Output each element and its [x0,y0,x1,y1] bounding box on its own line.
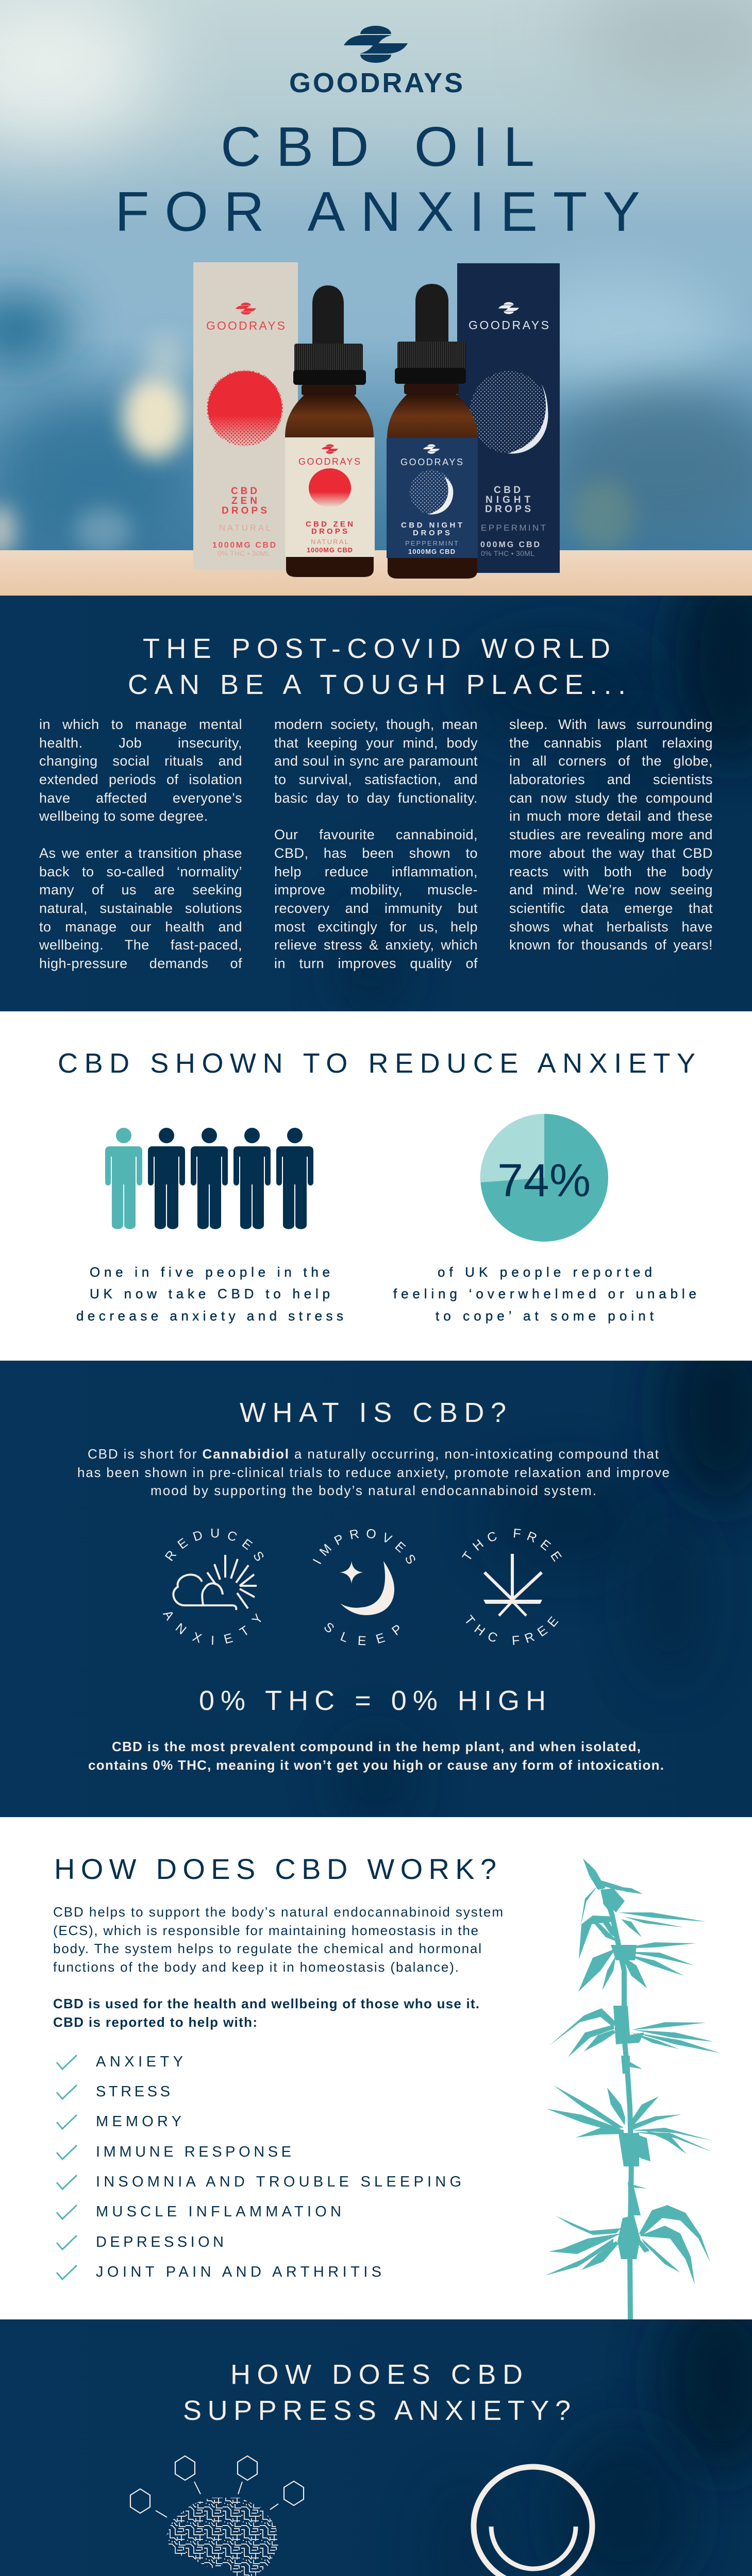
text column 3: scientific data emerge that [509,901,713,916]
text column 2: that keeping your mind, body [274,735,478,751]
text column 1 [39,716,242,976]
text column 3: shows what herbalists have [509,919,713,935]
intro paragraph: CBD is short for Cannabidiol a naturally occurring, non-intoxicating compound that [88,1446,659,1462]
intro paragraph: mood by supporting the body’s natural endocannabinoid system. [151,1483,596,1498]
product box: zen drops: GOODRAYS [206,319,285,332]
icon: improves sleep [312,1529,415,1646]
description paragraph: (ECS), which is responsible for maintaining homeostasis in the [53,1923,478,1938]
text column 2: most excitingly for us, help [274,919,478,935]
text column 2: Our favourite cannabinoid, [274,827,478,842]
text column 1: natural, sustainable solutions [39,901,242,916]
text column 3: in much more detail and these [509,808,713,824]
product bottle: zen drops: GOODRAYS [298,456,360,467]
bold paragraph [88,1739,664,1773]
logo [289,26,463,98]
text column 3: sleep. With laws surrounding [509,717,713,732]
heading [183,2359,571,2426]
text column 3: reacts with both the body [509,863,713,879]
icon: reduces anxiety [163,1529,264,1645]
hero blurred background [0,0,752,596]
text column 2: and soul in sync are paramount [274,753,478,769]
caption: one in five: decrease anxiety and stress [76,1308,343,1324]
table surface [0,550,752,596]
text column 1: changing social rituals and [39,753,242,769]
text column 3: can now study the compound [509,790,713,806]
heading: HOW DOES CBD WORK? [54,1853,496,1885]
pie chart: 74% [480,1114,608,1242]
pie chart: 74%: 74% [497,1155,591,1207]
product box: zen drops: CBD [231,486,257,497]
checklist: ANXIETY [96,2054,183,2070]
checklist [57,2054,461,2280]
product bottle: night drops [387,284,478,579]
logo: GOODRAYS [289,67,463,98]
text column 2: in turn improves quality of [274,956,478,971]
icon: improves sleep: SLEEP [325,1623,399,1646]
product box: night drops: CBD [494,485,521,496]
bold paragraph: CBD is the most prevalent compound in the hemp plant, and when isolated, [112,1739,641,1754]
intro paragraph [77,1446,670,1498]
text column 1: many of us are seeking [39,882,242,897]
caption: 74 percent: feeling ‘overwhelmed or unable [393,1286,696,1301]
heading: THE POST-COVID WORLD [143,633,610,664]
section background [0,596,752,1011]
title: CBD OIL [221,115,534,178]
description paragraph: functions of the body and keep it in homeostasis (balance). [53,1959,459,1975]
bold statement [53,1996,479,2030]
statement: 0% THC = 0% high: 0% THC = 0% HIGH [199,1685,546,1716]
product bottle: night drops: PEPPERMINT [405,539,458,547]
panel: CBD shown to reduce anxiety [0,1011,752,1361]
product box: night drops: 000MG CBD [480,540,540,549]
product bottle: night drops: GOODRAYS [400,457,463,467]
product box: zen drops: ZEN [231,496,257,506]
product bottle: zen drops: 1000MG CBD [307,546,353,554]
text column 3 [509,716,713,976]
product box: zen drops: 0% THC • 30ML [218,549,270,557]
caption: one in five: UK now take CBD to help [90,1286,330,1301]
bold statement: CBD is reported to help with: [53,2014,257,2030]
text column 2: relieve stress & anxiety, which [274,937,478,953]
title [115,115,640,243]
product box: zen drops: DROPS [222,505,267,516]
icon: improves sleep: IMPROVES [312,1529,415,1564]
product bottle: night drops: CBD NIGHT [401,521,462,530]
text column 3: and mind. We’re now seeing [509,882,713,897]
heading [128,633,626,700]
text column 3: known for thousands of years! [509,937,713,953]
checklist: DEPRESSION [96,2234,224,2250]
product box: night drops: NIGHT [486,495,530,505]
text column 1: As we enter a transition phase [39,845,242,861]
caption: 74 percent: to cope’ at some point [436,1308,654,1324]
panel: how does CBD work [0,1817,752,2319]
text column 2: to survival, satisfaction, and [274,772,478,787]
people pictogram: one in five [105,1128,313,1229]
text column 2: recovery and immunity but [274,901,478,916]
text column 3: laboratories and scientists [509,772,713,787]
checklist: JOINT PAIN AND ARTHRITIS [96,2264,381,2280]
product box: night drops: EPPERMINT [481,523,546,533]
product bottle: zen drops: CBD ZEN [306,520,353,529]
icon: circuit brain with molecules [130,2456,304,2576]
title: FOR ANXIETY [115,180,640,243]
text column 3: studies are revealing more and [509,827,713,842]
product box: zen drops: 1000MG CBD [212,541,276,550]
text column 1: in which to manage mental [39,717,242,732]
text column 1: health. Job insecurity, [39,735,242,751]
icon: THC free [462,1529,562,1645]
product bottle: zen drops: NATURAL [311,538,348,546]
text column 2: modern society, though, mean [274,717,478,732]
text column 1: wellbeing to some degree. [39,808,208,824]
checklist: STRESS [96,2083,170,2100]
text column 2: help reduce inflammation, [274,863,478,879]
product bottle: night drops: 1000MG CBD [408,548,455,555]
description paragraph [53,1904,503,1975]
text column 1: high-pressure demands of [39,956,242,971]
illustration: cannabis plant [545,1858,720,2319]
panel: how does CBD suppress anxiety [0,2319,752,2576]
text column 1: have affected everyone’s [39,790,242,806]
text column 3: in all corners of the globe, [509,753,713,769]
product box: night drops: 0% THC • 30ML [481,549,534,557]
product bottle: zen drops [285,285,375,577]
product bottle: night drops: DROPS [413,529,450,537]
section background [0,2319,752,2576]
icon: reduces anxiety: REDUCES [165,1529,264,1561]
icon: THC free: THC FREE [466,1615,559,1645]
icon: smiley [474,2467,592,2576]
product box: night drops [457,263,560,573]
text column 3: more about the way that CBD [509,845,713,861]
caption: 74 percent: of UK people reported [438,1264,652,1280]
description paragraph: body. The system helps to regulate the chemical and hormonal [53,1941,481,1956]
panel: hero [0,0,752,597]
text column 2 [274,716,478,976]
text column 2: basic day to day functionality. [274,790,478,806]
panel: post-covid world [0,596,752,1011]
heading: HOW DOES CBD [230,2359,523,2390]
heading: WHAT IS CBD? [240,1397,506,1428]
text column 2: improve mobility, muscle- [274,882,478,897]
text column 2: CBD, has been shown to [274,845,478,861]
product box: zen drops: NATURAL [219,523,271,533]
text column 1: extended periods of isolation [39,772,242,787]
heading: CBD SHOWN TO REDUCE ANXIETY [58,1048,695,1079]
caption: 74 percent [393,1264,696,1324]
icon: THC free: THC FREE [462,1529,562,1562]
icon: reduces anxiety: ANXIETY [163,1612,261,1645]
heading: CAN BE A TOUGH PLACE... [128,669,626,700]
product box: night drops: GOODRAYS [469,318,549,332]
caption: one in five: One in five people in the [90,1264,330,1280]
text column 1: back to so-called ‘normality’ [39,863,242,879]
checklist: MEMORY [96,2113,181,2130]
description paragraph: CBD helps to support the body’s natural endocannabinoid system [53,1904,503,1920]
text column 3: the cannabis plant relaxing [509,735,713,751]
product bottle: zen drops: DROPS [311,527,347,536]
checklist: IMMUNE RESPONSE [96,2144,291,2160]
bold paragraph: contains 0% THC, meaning it won’t get you high or cause any form of intoxication. [88,1757,664,1773]
caption: one in five [76,1264,343,1324]
checklist: INSOMNIA AND TROUBLE SLEEPING [96,2174,461,2190]
checklist: MUSCLE INFLAMMATION [96,2204,341,2220]
intro paragraph: has been shown in pre-clinical trials to reduce anxiety, promote relaxation and improve [77,1465,670,1480]
section background [0,1361,752,1817]
text column 1: to manage our health and [39,919,242,935]
bold statement: CBD is used for the health and wellbeing of those who use it. [53,1996,479,2011]
heading: SUPPRESS ANXIETY? [183,2395,571,2426]
product box: night drops: DROPS [485,504,531,515]
product box: zen drops [193,262,298,570]
text column 1: wellbeing. The fast-paced, [39,937,242,953]
panel: what is CBD [0,1361,752,1817]
